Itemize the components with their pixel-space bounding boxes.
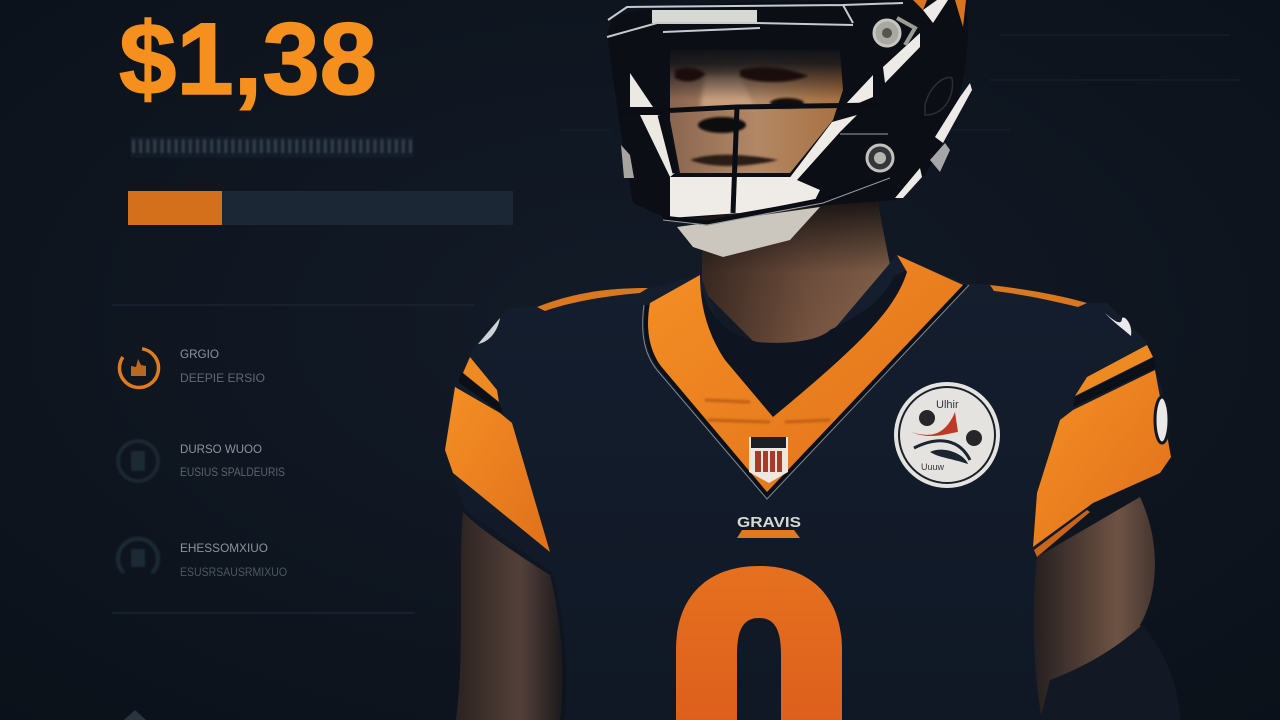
nose shadow	[698, 117, 746, 133]
swoosh right	[1105, 313, 1131, 336]
sleeve right	[1033, 370, 1171, 547]
helmet stripes right	[883, 0, 972, 198]
shoulder piping	[537, 285, 1087, 311]
jersey wordmark: GRAVIS	[737, 514, 801, 531]
jersey body	[445, 255, 1171, 720]
icon: orange ring	[116, 345, 162, 391]
collar	[648, 255, 963, 492]
helmet orange tips	[913, 0, 966, 27]
progress bar	[128, 191, 513, 225]
eyes	[675, 67, 808, 82]
label: first row: GRGIO	[180, 347, 219, 361]
collar trim	[646, 285, 966, 495]
stat row: orange icon	[116, 345, 265, 391]
label: second row: DURSO WUOO	[180, 442, 262, 456]
helmet shell	[607, 0, 968, 220]
collar folds	[705, 400, 830, 422]
wrist band	[1040, 625, 1180, 720]
chin cup	[677, 207, 820, 257]
divider lines	[112, 305, 475, 613]
chest badge	[894, 382, 1000, 488]
blurred caption line: IIIIIIIIIIIIIIIIIIIIIIIIIIIIIIIIIIIIIIII	[130, 137, 414, 158]
helmet white left strip	[640, 115, 675, 177]
sleeve left dark stripe	[458, 372, 503, 414]
jersey number	[676, 566, 842, 720]
undershirt	[702, 270, 907, 417]
helmet hardware	[621, 18, 950, 178]
facemask bars	[620, 105, 890, 225]
chin guard	[670, 177, 820, 218]
icon: bottom marker	[124, 710, 146, 720]
player arm left	[456, 512, 562, 720]
sleeve right dark stripe	[1073, 358, 1156, 407]
helmet top window	[652, 10, 757, 23]
player arm right	[1030, 497, 1165, 720]
helmet rails	[607, 3, 903, 37]
helmet white left triangle	[630, 73, 653, 107]
headline figure: $1,38	[119, 2, 377, 116]
sublabel: first row: DEEPIE ERSIO	[180, 373, 265, 385]
sleeve right lower stripe	[1034, 510, 1090, 557]
face	[664, 44, 850, 173]
sublabel: third row: ESUSRSAUSRMIXUO	[180, 567, 287, 579]
jersey wordmark	[737, 514, 801, 538]
shield logo	[749, 437, 788, 483]
label: third row: EHESSOMXIUO	[180, 541, 268, 555]
sleeve left	[445, 387, 550, 552]
sleeve right upper stripe	[1075, 345, 1153, 396]
stat row: muted icon two	[118, 441, 285, 481]
sublabel: second row: EUSIUS SPALDEURIS	[180, 467, 285, 479]
icon: muted ring	[118, 441, 158, 481]
neck	[702, 200, 895, 345]
mouth	[690, 155, 778, 166]
icon: muted ring three	[118, 539, 158, 573]
stat row: muted icon three	[118, 539, 287, 579]
cheek shadow	[770, 98, 804, 108]
ear hole ring	[925, 77, 953, 115]
eye shade	[664, 44, 850, 100]
chest badge: Ulhir	[936, 399, 959, 411]
swoosh left	[478, 318, 500, 344]
sleeve left upper stripe	[463, 357, 499, 402]
sleeve logo	[1155, 397, 1169, 443]
face bridge highlight	[700, 75, 755, 108]
player	[445, 0, 1180, 720]
collar piping	[643, 285, 969, 499]
chin frame strips	[788, 75, 873, 180]
chest badge: Uuuw	[921, 462, 945, 472]
